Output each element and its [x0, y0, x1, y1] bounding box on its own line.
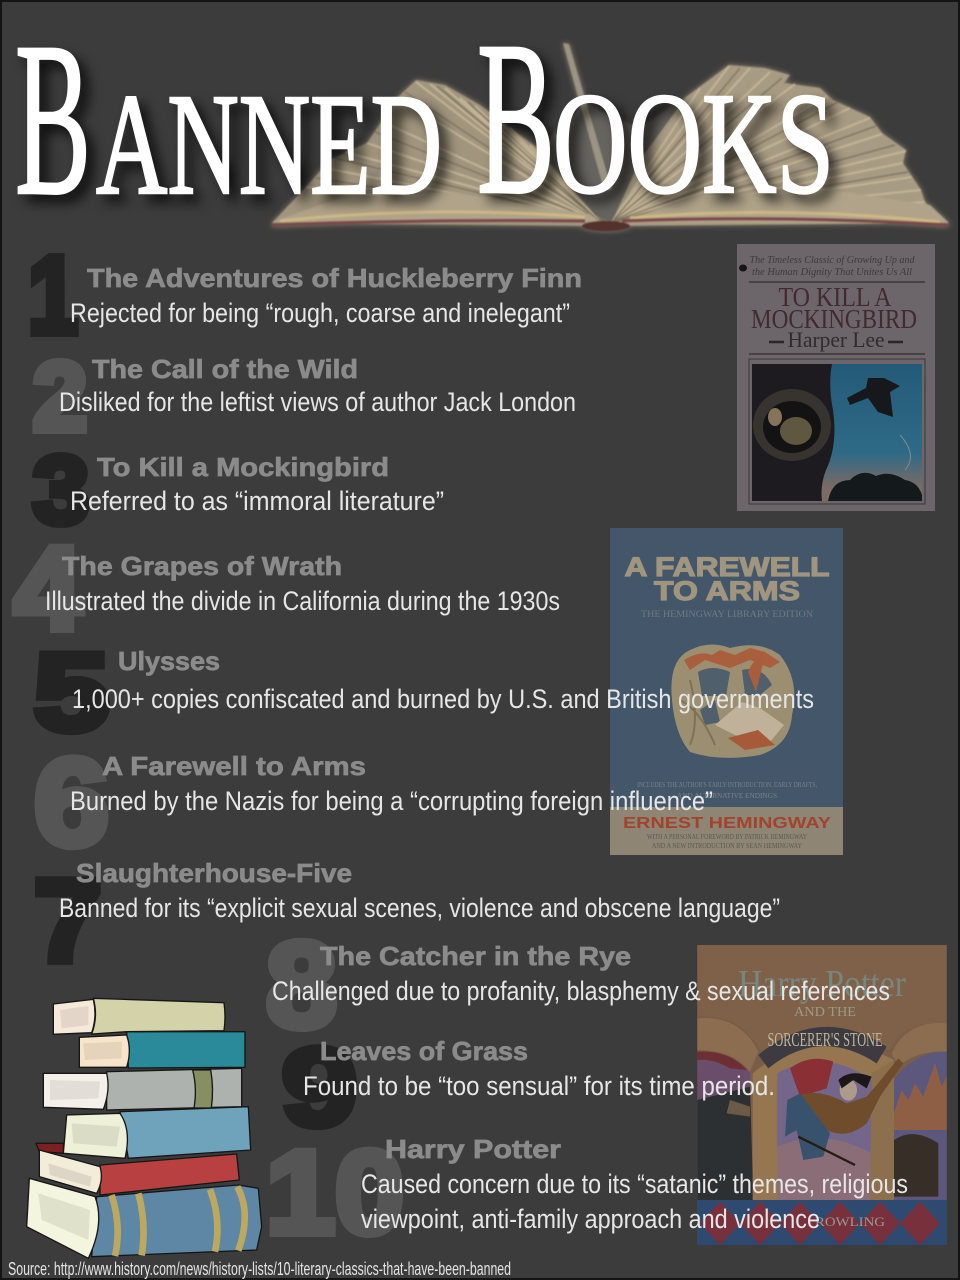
- title: B: [477, 0, 555, 240]
- book 6: [27, 1178, 262, 1258]
- entry 10: Harry Potter: [385, 1134, 561, 1164]
- entry 5: Ulysses: [118, 646, 220, 676]
- entry 1: [70, 263, 582, 328]
- title: ANNED: [96, 65, 442, 225]
- book cover: Harry Potter: ROWLING: [815, 1214, 885, 1229]
- title: B: [15, 0, 91, 241]
- entry 3: To Kill a Mockingbird: [97, 452, 389, 482]
- book 4: [63, 1107, 251, 1158]
- rank numerals: 1: [28, 234, 78, 357]
- entry 2: The Call of the Wild: [92, 354, 358, 384]
- entry 7: [59, 858, 780, 923]
- entry 4: The Grapes of Wrath: [62, 551, 342, 581]
- book 1: [53, 998, 225, 1034]
- entry 6: A Farewell to Arms: [102, 751, 366, 781]
- book cover: A Farewell to Arms: THE HEMINGWAY LIBRARY EDITION: [641, 609, 814, 619]
- rank numerals: 4: [14, 523, 82, 655]
- book 2: [79, 1032, 245, 1068]
- entry 3: Referred to as “immoral literature”: [70, 486, 444, 516]
- entry 6: Burned by the Nazis for being a “corrupting foreign influence”: [70, 786, 713, 816]
- rank numerals: 10: [266, 1127, 404, 1259]
- entry 9: [303, 1036, 775, 1101]
- book cover: A Farewell to Arms: [610, 528, 843, 855]
- title: OOKS: [553, 64, 834, 224]
- entry 2: Disliked for the leftist views of author Jack London: [59, 387, 576, 417]
- book cover: Harry Potter: AND THE: [794, 1005, 856, 1020]
- book cover: A Farewell to Arms: TO ARMS: [654, 576, 800, 606]
- book cover: A Farewell to Arms: AND A NEW INTRODUCTION BY SEAN HEMINGWAY: [652, 842, 802, 850]
- book cover: Harry Potter: SORCERER'S STONE: [768, 1029, 882, 1051]
- entry 1: The Adventures of Huckleberry Finn: [87, 263, 582, 293]
- rank numerals: 3: [33, 437, 89, 544]
- entry 7: Slaughterhouse-Five: [76, 858, 352, 888]
- book cover: To Kill a Mockingbird: The Timeless Classic of Growing Up and: [750, 255, 915, 266]
- rank numerals: 6: [34, 734, 109, 872]
- entry 8: The Catcher in the Rye: [320, 941, 631, 971]
- book cover: A Farewell to Arms: ERNEST HEMINGWAY: [623, 815, 831, 832]
- entry 2: [59, 354, 576, 417]
- book cover: To Kill a Mockingbird: MOCKINGBIRD: [751, 304, 917, 334]
- rank numerals: 5: [34, 631, 109, 754]
- book cover: To Kill a Mockingbird: [737, 244, 935, 511]
- entry 7: Banned for its “explicit sexual scenes, violence and obscene language”: [59, 893, 780, 923]
- rank numerals: [14, 234, 404, 1259]
- entry 4: Illustrated the divide in California during the 1930s: [45, 586, 560, 616]
- entry 4: [45, 551, 560, 616]
- book cover: A Farewell to Arms: INCLUDES THE AUTHOR'S EARLY INTRODUCTION, EARLY DRAFTS,: [637, 780, 817, 789]
- entry 5: 1,000+ copies confiscated and burned by U.S. and British governments: [72, 684, 814, 714]
- book cover: To Kill a Mockingbird: TO KILL A: [778, 282, 892, 312]
- illustration: figures and leaves: [671, 644, 794, 758]
- rank numerals: 8: [266, 917, 337, 1053]
- entry 5: [72, 646, 814, 714]
- entry 10: [361, 1134, 908, 1234]
- book cover: To Kill a Mockingbird: Harper Lee: [788, 327, 884, 352]
- book cover: Harry Potter: Harry Potter: [738, 963, 906, 1005]
- rank numerals: 7: [34, 855, 102, 986]
- entry 9: Leaves of Grass: [320, 1036, 528, 1066]
- rank numerals: 9: [282, 1026, 357, 1149]
- source line: Source: http://www.history.com/news/history-lists/10-literary-classics-that-have-been-banned: [8, 1259, 511, 1279]
- book cover: A Farewell to Arms: AND ALTERNATIVE ENDINGS: [677, 791, 777, 800]
- book cover: A Farewell to Arms: A FAREWELL: [624, 552, 830, 582]
- entry 3: [70, 452, 444, 516]
- book 3: [43, 1068, 242, 1110]
- illustration: stack of books: [27, 998, 262, 1258]
- entry 9: Found to be “too sensual” for its time period.: [303, 1071, 775, 1101]
- book cover: To Kill a Mockingbird: the Human Dignity That Unites Us All: [752, 267, 912, 278]
- entry 10: viewpoint, anti-family approach and violence: [361, 1204, 820, 1234]
- illustration: open book: [272, 43, 949, 231]
- book 5: [36, 1143, 239, 1195]
- rank numerals: 2: [33, 342, 87, 451]
- entry 6: [70, 751, 713, 816]
- book cover: Harry Potter: [697, 945, 947, 1245]
- title: [15, 0, 834, 241]
- entry 8: [272, 941, 890, 1006]
- book cover: A Farewell to Arms: WITH A PERSONAL FOREWORD BY PATRICK HEMINGWAY: [647, 833, 807, 841]
- entry 1: Rejected for being “rough, coarse and inelegant”: [70, 298, 570, 328]
